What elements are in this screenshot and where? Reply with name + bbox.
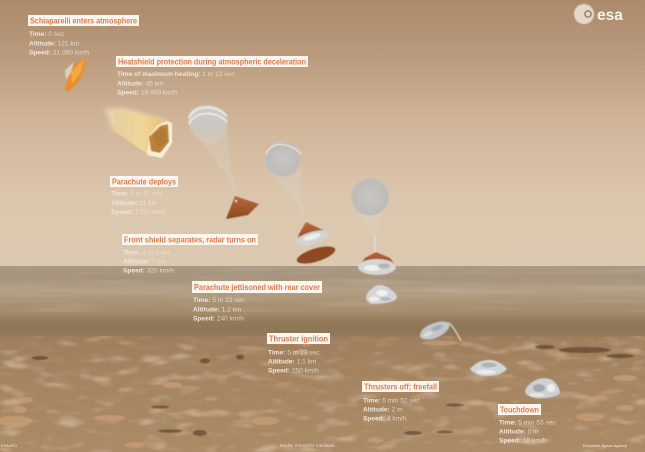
text block: Thruster ignition: Altitude: 1.1 km (268, 358, 317, 366)
text block: Parachute deploys: Speed: 1700 km/h (111, 209, 166, 216)
text block: Parachute jettisoned: Parachute jettisoned with rear cover (194, 283, 320, 292)
text block: Front shield separates (122, 234, 258, 274)
text block: Touchdown: Altitude: 0 m (499, 428, 539, 436)
text block: Schiaparelli enters atmosphere: Speed: 21 000 km/h (29, 50, 89, 56)
text block: Schiaparelli enters atmosphere: Altitude: 121 km (29, 40, 80, 48)
text block: Schiaparelli enters atmosphere: Time: 0 sec (29, 31, 65, 38)
text block: Heatshield protection: Time of maximum heating: 1 m 12 sec (117, 71, 235, 78)
text block: Schiaparelli enters atmosphere (28, 15, 139, 56)
text block: Thrusters off, freefall: Thrusters off; freefall (364, 382, 437, 392)
text block: Heatshield protection: Altitude: 45 km (117, 80, 164, 88)
text block: Parachute jettisoned: Time: 5 m 22 sec (193, 297, 245, 304)
text block: Thrusters off, freefall: Speed: 4 km/h (363, 416, 407, 422)
text block: Heatshield protection (116, 56, 308, 96)
icon: lander with thrusters firing (420, 321, 461, 346)
text block: Parachute deploys (110, 176, 178, 216)
icon: third parachute with capsule (351, 178, 396, 275)
text block: Thrusters off, freefall (362, 381, 439, 422)
text block: Touchdown: Time: 5 min 53 sec (499, 420, 556, 426)
text block: Thrusters off, freefall: Altitude: 2 m (363, 406, 403, 414)
text block: Front shield separates: Front shield separates, radar turns on (124, 236, 256, 244)
icon: lander in freefall (470, 360, 507, 376)
text block: Thrusters off, freefall: Time: 5 min 52 sec (363, 398, 420, 404)
text block: Schiaparelli enters atmosphere: Schiaparelli enters atmosphere (30, 16, 137, 26)
icon: capsule with heatshield plasma trail (104, 108, 172, 158)
footer credits: Media: ESA/ATG medialab (280, 443, 335, 448)
text block: Touchdown (498, 404, 556, 444)
text block: Thruster ignition (267, 333, 330, 374)
text block: Touchdown: Touchdown (500, 406, 539, 414)
text block: Thruster ignition: Thruster ignition (269, 334, 328, 344)
text block: Parachute deploys: Altitude: 11 km (111, 200, 158, 207)
text block: Thruster ignition: Time: 5 m 23 sec (268, 350, 320, 356)
text block: Front shield separates: Speed: 320 km/h (123, 268, 174, 274)
footer credits: European Space Agency (583, 443, 627, 448)
icon: lander after jettison (366, 285, 397, 304)
text block: Front shield separates: Altitude: 7 km (123, 258, 166, 266)
icon: first parachute with capsule (188, 105, 259, 219)
background: Martian ground (0, 266, 645, 452)
background: Martian sky (0, 0, 645, 268)
icon: lander after touchdown (525, 378, 560, 398)
text block: Parachute jettisoned: Altitude: 1.2 km (193, 306, 242, 314)
text block: Front shield separates: Time: 4 m 1 sec (123, 250, 172, 256)
logo: esa: esa (597, 7, 623, 24)
text block: Parachute jettisoned (192, 281, 322, 322)
icon: second parachute with capsule and separating front shield (265, 141, 337, 267)
text block: Parachute jettisoned: Speed: 240 km/h (193, 316, 244, 322)
text block: Heatshield protection: Heatshield protection during atmospheric deceleration (118, 58, 306, 66)
text block: Touchdown: Speed: 10 km/h (499, 438, 547, 444)
footer credits (1, 443, 627, 448)
text block: Thruster ignition: Speed: 250 km/h (268, 368, 319, 374)
text block: Parachute deploys: Parachute deploys (112, 178, 176, 186)
icon: Schiaparelli capsule entering atmosphere (65, 58, 86, 92)
footer credits: ESA/ATG (1, 444, 17, 448)
text block: Parachute deploys: Time: 3 m 21 sec (111, 190, 163, 198)
text block: Heatshield protection: Speed: 19 000 km/h (117, 90, 177, 96)
logo: esa (574, 4, 623, 24)
